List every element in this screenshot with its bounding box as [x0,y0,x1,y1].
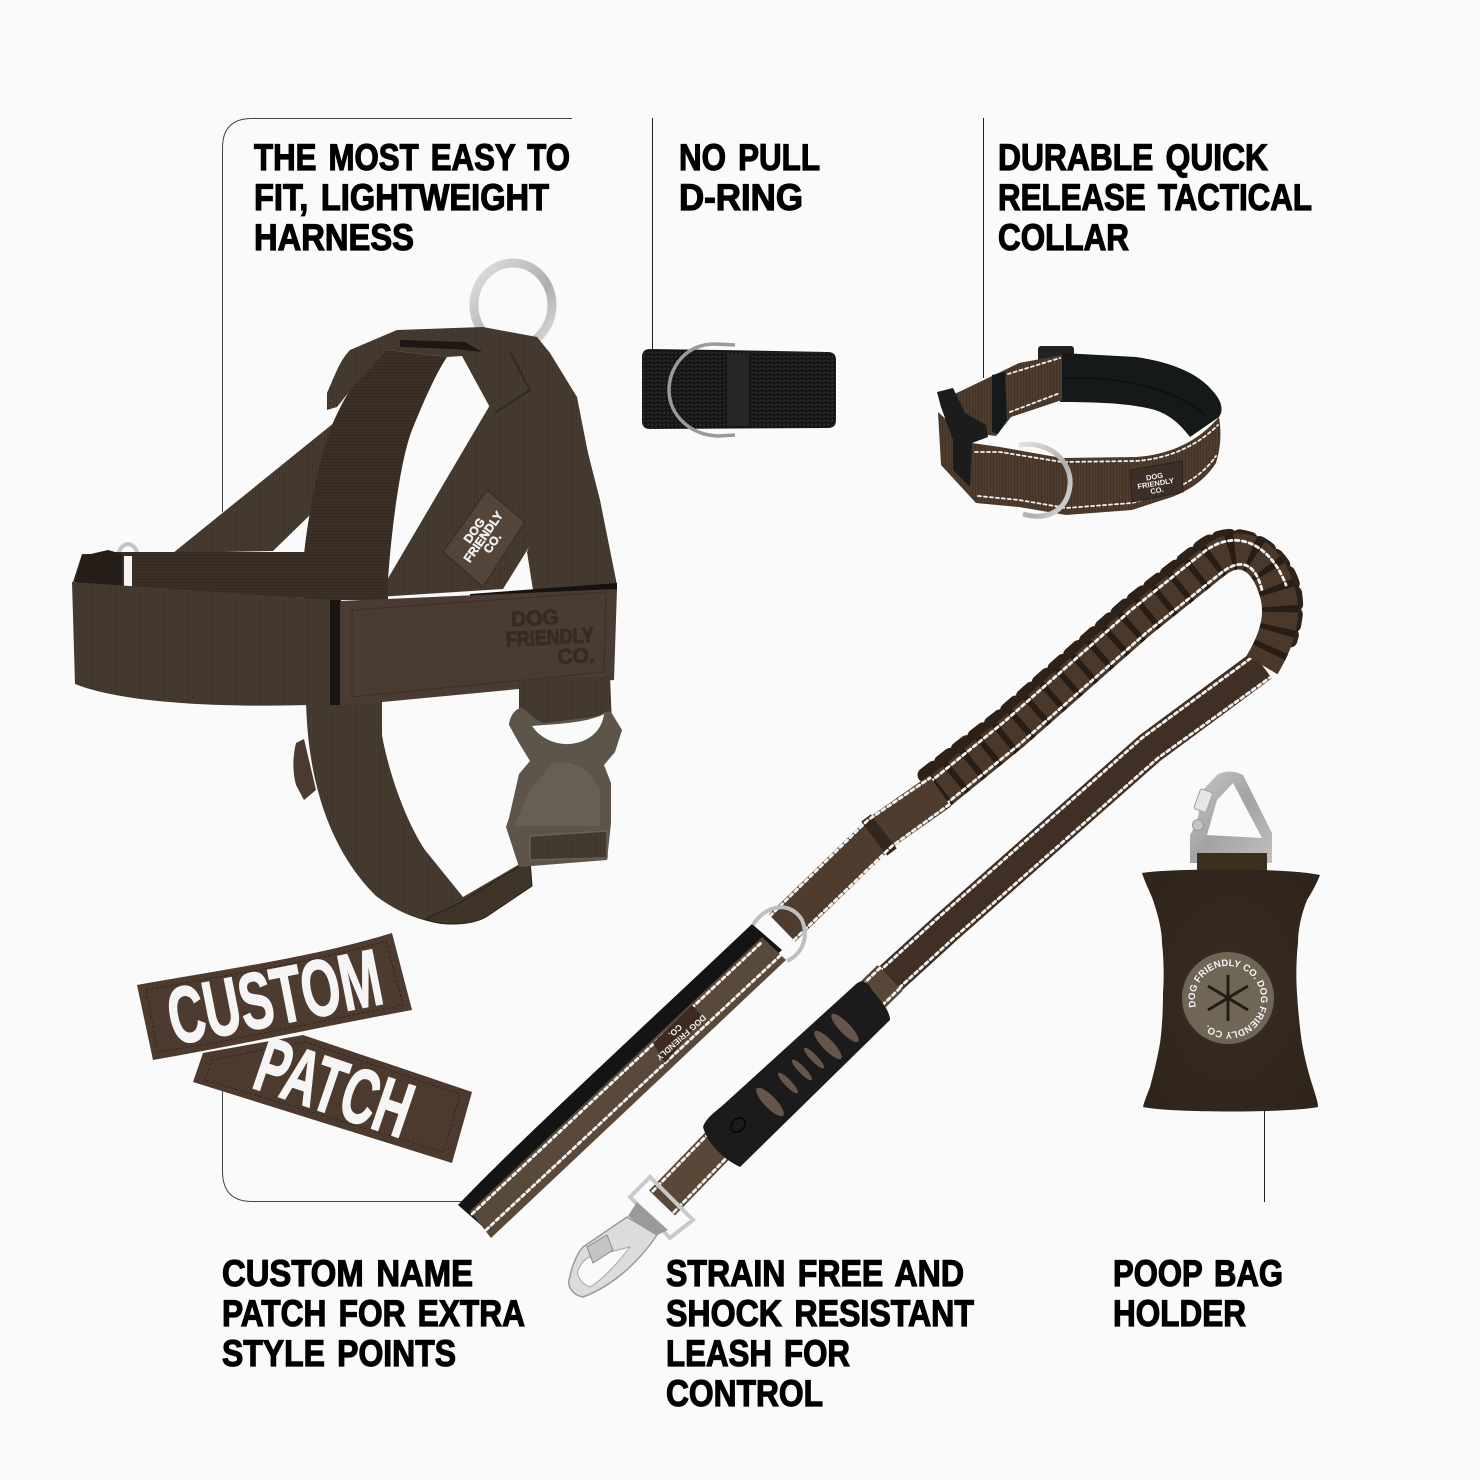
front band [72,582,332,706]
leash bungee section [938,552,1280,793]
heading: d-ring: D-RING [679,177,803,218]
buckle [506,708,622,867]
heading: harness: HARNESS [254,217,414,258]
velcro patch [642,349,836,429]
lower strap [306,700,532,924]
harness tag: CO. [481,530,504,556]
yoke black inner [400,340,482,352]
leash lower stitching [872,650,1272,998]
collar d-ring [1019,444,1070,516]
harness tag: DOG [461,515,488,546]
leather logo: CO. [557,644,595,669]
buckle strap [519,676,612,726]
velcro strip [330,600,341,705]
heading: harness: FIT, LIGHTWEIGHT [254,177,549,218]
metal d-ring [669,344,735,436]
heading: poop bag: POOP BAG [1113,1253,1283,1294]
collar [937,346,1222,516]
harness d-ring [474,263,552,347]
patch: CUSTOM [137,932,412,1062]
carabiner ball [1192,820,1204,830]
webbing fold [727,354,749,426]
heading: poop bag [1113,1253,1283,1334]
diagonal chest strap [377,405,584,597]
leather top black edge [470,583,617,600]
bungee stitching [930,540,1286,804]
leash [458,536,1296,1297]
leash upper strand [782,791,940,928]
heading: patch: CUSTOM NAME [222,1253,473,1294]
leash bungee scallops [925,536,1296,775]
inner band black edge [75,550,122,590]
ring gap [124,556,132,594]
leash lower strand [880,665,1262,988]
heading: d-ring [679,137,820,218]
heading: d-ring: NO PULL [679,137,820,178]
collar label: FRIENDLY [1137,476,1175,491]
bungee ribs [938,552,1280,793]
collar neoprene lining [1060,353,1222,437]
pouch body [1142,869,1320,1112]
patch: CUSTOM: CUSTOM [160,932,389,1062]
custom patches [137,932,472,1163]
heading: leash [666,1253,974,1414]
collar front band [938,412,1220,515]
handle tag: CO. [666,1022,684,1040]
inner band cover [110,552,306,598]
collar top loop [1038,346,1074,362]
handle neoprene [458,924,782,1226]
webbing loop [1197,853,1267,873]
heading: collar: COLLAR [998,217,1129,258]
snap hook [569,1177,693,1297]
callout line: d-ring [652,118,654,350]
collar keeper [992,372,1007,434]
heading: leash: CONTROL [666,1373,823,1414]
patch: PATCH [193,1020,472,1163]
leather logo: FRIENDLY [505,624,594,652]
heading: poop bag: HOLDER [1113,1293,1246,1334]
upper strand stitching [770,778,950,940]
leash d-ring [753,907,805,961]
collar label: DOG [1145,471,1164,483]
callout line: patch [222,1085,462,1202]
collar stitching [975,358,1218,508]
small side ring [117,544,139,580]
heading: leash: STRAIN FREE AND [666,1253,964,1294]
leather logo [504,604,595,672]
slider [293,739,316,800]
lower strap dark fold [425,860,532,924]
harness tag: FRIENDLY [461,509,506,565]
heading: collar [998,137,1312,258]
heading: patch [222,1253,525,1374]
heading: harness [254,137,570,258]
heading: leash: LEASH FOR [666,1333,850,1374]
collar buckle [937,388,988,487]
collar back band [945,355,1062,436]
back inner band [73,554,330,598]
upper strand fold [866,818,892,852]
harness [72,263,622,924]
collar label [1130,461,1183,502]
collar lining crease [1064,378,1205,415]
leather stitching [352,592,606,697]
bottom strand stitching [652,968,900,1213]
leather logo: DOG [510,606,559,631]
leash bottom strand [662,978,890,1203]
patch: PATCH: PATCH [245,1020,424,1155]
carabiner [1190,772,1272,863]
heading: patch: PATCH FOR EXTRA [222,1293,525,1334]
left diagonal strap [173,422,345,553]
outer right strap [527,400,617,590]
collar label: CO. [1150,485,1164,496]
handle stitching [472,942,782,1230]
heading: patch: STYLE POINTS [222,1333,456,1374]
heading: harness: THE MOST EASY TO [254,137,570,178]
badge: DOG FRIENDLY CO. DOG FRIENDLY CO. [1188,959,1268,1039]
rubber grip [703,981,890,1167]
heading: collar: RELEASE TACTICAL [998,177,1312,218]
heading: collar: DURABLE QUICK [998,137,1268,178]
carabiner lock [1194,789,1213,813]
callout line: poop bag [1264,1108,1266,1202]
poop bag holder [1142,772,1320,1112]
callout line: harness [222,118,572,512]
harness tag [443,490,525,587]
heading: leash: SHOCK RESISTANT [666,1293,974,1334]
handle band [470,937,786,1238]
inner back strap [304,350,447,600]
d-ring velcro patch [642,344,836,436]
yoke [327,327,588,453]
leather panel [340,589,617,706]
yoke fold shadow [495,352,530,413]
callout line: collar [982,118,984,378]
handle tag: DOG FRIENDLY [654,1013,708,1063]
